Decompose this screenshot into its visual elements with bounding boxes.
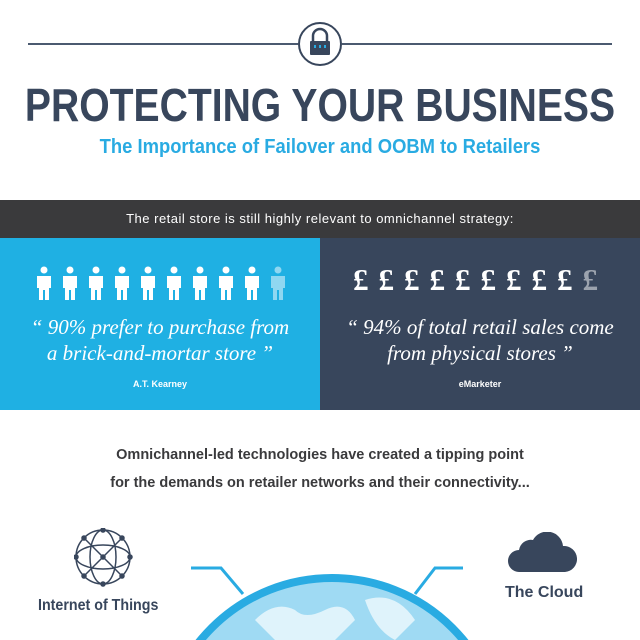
quote: “ 90% prefer to purchase from bbox=[31, 315, 289, 339]
intro text: for the demands on retailer networks and their connectivity... bbox=[110, 475, 530, 491]
icon: internet of things bbox=[74, 528, 133, 587]
intro text bbox=[110, 447, 530, 491]
title: PROTECTING YOUR BUSINESS bbox=[25, 79, 615, 131]
header line with lock icon bbox=[28, 22, 612, 66]
dark banner: The retail store is still highly relevant to omnichannel strategy: bbox=[126, 211, 514, 226]
icon: cloud bbox=[508, 532, 577, 572]
quote: from physical stores ” bbox=[387, 341, 573, 365]
dark banner bbox=[0, 200, 640, 238]
source: eMarketer bbox=[459, 379, 501, 389]
source: A.T. Kearney bbox=[133, 379, 187, 389]
icon row: people bbox=[37, 266, 285, 300]
subtitle: The Importance of Failover and OOBM to Retailers bbox=[100, 136, 540, 158]
panel: 94% sales bbox=[320, 238, 640, 410]
label: the cloud: The Cloud bbox=[505, 584, 583, 601]
quote bbox=[31, 315, 289, 365]
intro text: Omnichannel-led technologies have created a tipping point bbox=[116, 447, 524, 463]
globe with connector lines bbox=[191, 566, 468, 640]
panel: 90% prefer stores bbox=[0, 238, 320, 410]
label: internet of things: Internet of Things bbox=[38, 597, 158, 614]
icon row: pounds: ££££££££££ bbox=[353, 262, 608, 297]
quote bbox=[346, 315, 614, 365]
quote: “ 94% of total retail sales come bbox=[346, 315, 614, 339]
quote: a brick-and-mortar store ” bbox=[47, 341, 273, 365]
